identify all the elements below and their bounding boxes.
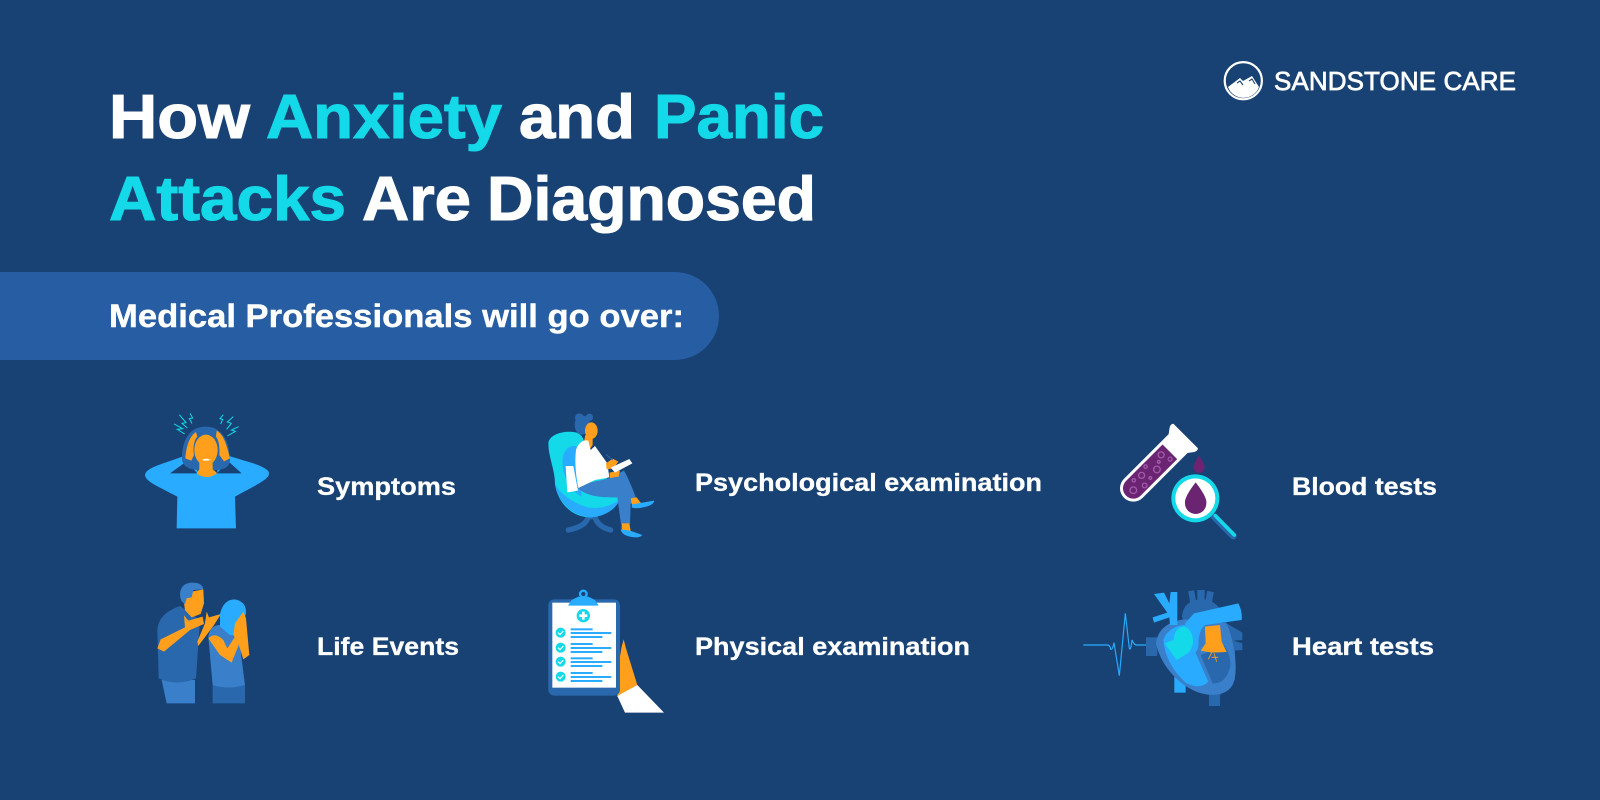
title: How xyxy=(109,83,251,152)
subtitle banner: Medical Professionals will go over: xyxy=(109,298,684,334)
item: life events xyxy=(157,583,459,703)
label: Heart tests xyxy=(1292,633,1434,661)
icon: clipboard and hand xyxy=(548,591,664,713)
title xyxy=(109,83,824,234)
icon: person in chair taking notes xyxy=(548,413,654,537)
title: Diagnosed xyxy=(487,165,816,234)
icon: heart with pulse line xyxy=(1083,590,1242,706)
title: Are xyxy=(362,165,471,234)
subtitle banner xyxy=(0,272,719,360)
icon: test tube and magnifier xyxy=(1111,423,1234,536)
label: Blood tests xyxy=(1292,473,1437,501)
title: and xyxy=(519,83,635,152)
logo: Sandstone Care: SANDSTONE CARE xyxy=(1274,66,1516,96)
item: heart tests xyxy=(1083,590,1434,706)
title: Attacks xyxy=(109,165,346,234)
logo: Sandstone Care xyxy=(1225,62,1516,99)
item: psychological examination xyxy=(548,413,1042,537)
title: Anxiety xyxy=(266,83,503,152)
label: Life Events xyxy=(317,633,459,661)
item: physical examination xyxy=(548,591,970,713)
item: symptoms xyxy=(145,413,456,528)
title: Panic xyxy=(654,83,824,152)
item: blood tests xyxy=(1111,423,1437,536)
label: Psychological examination xyxy=(695,469,1042,497)
icon: person holding head xyxy=(145,413,269,528)
label: Physical examination xyxy=(695,633,970,661)
label: Symptoms xyxy=(317,473,456,501)
icon: arguing couple xyxy=(157,583,249,703)
